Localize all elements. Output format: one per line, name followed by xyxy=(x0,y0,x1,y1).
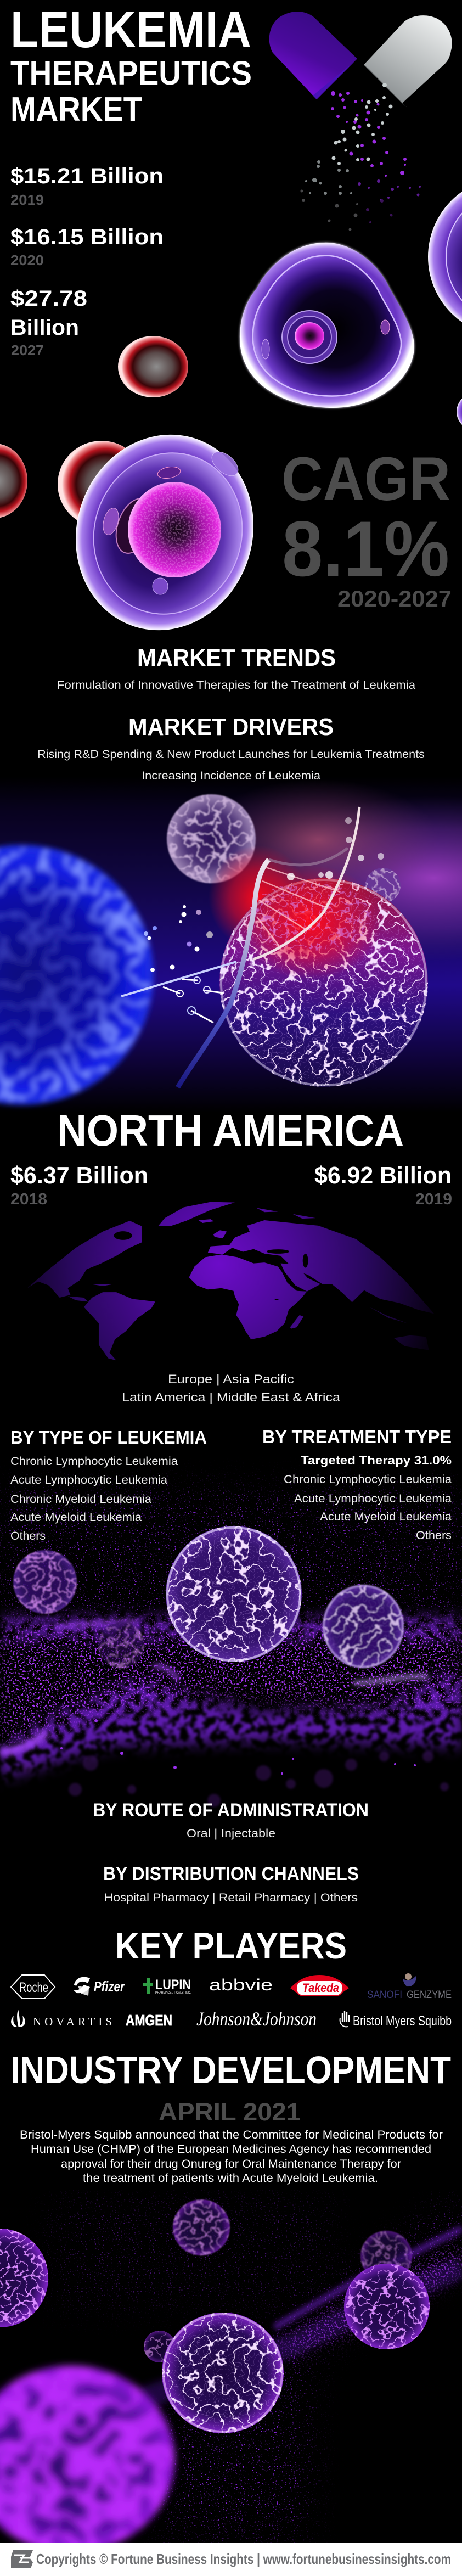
value: north america 2019: 2019 xyxy=(415,1191,452,1208)
logo: Sanofi Genzyme xyxy=(367,1973,452,2001)
logo: Lupin: PHARMACEUTICALS, INC. xyxy=(155,1991,191,1995)
list: Others xyxy=(416,1529,452,1542)
cell: large purple with magenta nucleus xyxy=(50,411,279,654)
DNA strand xyxy=(121,807,359,1087)
CAGR callout: 8.1% xyxy=(282,506,449,593)
list: Acute Myeloid Leukemia xyxy=(320,1511,452,1523)
CAGR callout: CAGR xyxy=(281,445,450,513)
text: development description: approval for their drug Onureg for Oral Maintenance Therapy for xyxy=(61,2158,401,2170)
text: trend: Formulation of Innovative Therapies for the Treatment of Leukemia xyxy=(57,679,415,692)
title: MARKET xyxy=(10,91,142,128)
panel: by type of leukemia xyxy=(10,1427,207,1542)
heading: key players: KEY PLAYERS xyxy=(115,1925,347,1967)
sparse particles xyxy=(0,1493,462,1625)
list: Others xyxy=(10,1530,46,1542)
value: north america 2018 xyxy=(10,1162,148,1208)
panel: market drivers xyxy=(37,714,425,782)
logo: Pfizer: Pfizer xyxy=(94,1978,125,1995)
list: Chronic Lymphocytic Leukemia xyxy=(10,1455,178,1468)
panel: by treatment type xyxy=(262,1427,452,1542)
cell: small behind center xyxy=(144,2331,176,2362)
map details: inland seas xyxy=(114,1231,308,1300)
cell: right edge large xyxy=(428,177,462,336)
heading: BY DISTRIBUTION CHANNELS xyxy=(103,1864,359,1884)
heading: BY TYPE OF LEUKEMIA xyxy=(10,1427,207,1447)
text: drivers: Increasing Incidence of Leukemia xyxy=(142,770,320,782)
cell: small dim left xyxy=(13,1550,77,1614)
text: other regions xyxy=(122,1372,341,1404)
CAGR callout: 2020-2027 xyxy=(337,586,452,611)
logo: Roche: Roche xyxy=(19,1980,48,1995)
logo: Takeda xyxy=(290,1975,349,1996)
value: north america 2019: $6.92 Billion xyxy=(314,1162,452,1189)
cell: right dim xyxy=(360,2230,413,2270)
cell: red left edge xyxy=(0,444,27,518)
text: drivers xyxy=(37,748,425,782)
value: north america 2018: $6.37 Billion xyxy=(10,1162,148,1189)
icon: Fortune Business Insights logo xyxy=(11,2550,33,2568)
items: Hospital Pharmacy | Retail Pharmacy | Others xyxy=(104,1892,358,1904)
panel: footer xyxy=(0,2543,462,2576)
list xyxy=(284,1473,452,1542)
list: Acute Lymphocytic Leukemia xyxy=(10,1474,167,1486)
highlighted share: Targeted Therapy 31.0% xyxy=(301,1453,452,1467)
title: LEUKEMIA xyxy=(10,1,251,58)
small bright dots xyxy=(60,1719,416,1775)
logo: Novartis xyxy=(12,2011,112,2028)
cell: right xyxy=(323,1585,404,1668)
list: Acute Lymphocytic Leukemia xyxy=(294,1492,452,1505)
cell: right edge small xyxy=(457,390,462,434)
logo: Amgen: AMGEN xyxy=(126,2012,172,2029)
cell: left bright xyxy=(0,2229,48,2327)
panel: bottom cells illustration xyxy=(0,2196,462,2552)
date: April 2021: APRIL 2021 xyxy=(159,2098,301,2126)
cell: blurred foreground xyxy=(0,2366,174,2552)
text: other regions: Latin America | Middle East & Africa xyxy=(122,1390,341,1404)
logo: Lupin xyxy=(143,1977,191,1995)
cell: small right xyxy=(365,868,401,903)
logo: Novartis: NOVARTIS xyxy=(33,2015,112,2028)
value 2027: 2027 xyxy=(11,342,44,358)
value 2027: Billion xyxy=(10,316,79,340)
value 2019: $15.21 Billion xyxy=(10,164,164,188)
cell: dim lower left xyxy=(98,1622,144,1668)
list: Chronic Lymphocytic Leukemia xyxy=(284,1473,452,1486)
panel: by route of administration xyxy=(93,1800,369,1840)
logo: AbbVie: abbvie xyxy=(209,1976,273,1994)
text: development description xyxy=(20,2129,443,2185)
cell: blurred grey upper xyxy=(167,794,256,883)
cell: red behind large cell xyxy=(58,441,145,527)
value 2027: $27.78 xyxy=(10,287,87,311)
logo: Sanofi Genzyme: GENZYME xyxy=(407,1989,452,2001)
floating dots xyxy=(144,817,384,972)
items: Oral | Injectable xyxy=(187,1827,275,1840)
value 2020: $16.15 Billion xyxy=(10,225,164,249)
text: drivers: Rising R&D Spending & New Product Launches for Leukemia Treatments xyxy=(37,748,425,761)
panel: particle wave with cells xyxy=(0,1493,462,1807)
panel: by distribution channels xyxy=(103,1864,359,1904)
world map xyxy=(27,1202,434,1360)
cell: center bright xyxy=(162,2313,284,2433)
icon: open capsule xyxy=(269,12,452,108)
cell: right bright xyxy=(344,2264,430,2349)
logo: Sanofi Genzyme: SANOFI xyxy=(367,1989,402,2001)
value 2020: 2020 xyxy=(10,252,44,268)
logo: Roche xyxy=(11,1975,55,1999)
value: north america 2018: 2018 xyxy=(10,1191,47,1208)
logo: Pfizer xyxy=(74,1977,125,1996)
value 2020 xyxy=(10,225,164,268)
text: other regions: Europe | Asia Pacific xyxy=(168,1372,294,1386)
panel: company logos xyxy=(11,1973,452,2030)
value: north america 2019 xyxy=(314,1162,452,1208)
cell: top dim xyxy=(173,2199,230,2255)
title: THERAPEUTICS xyxy=(10,54,252,92)
dense particles xyxy=(0,1625,462,1746)
value 2019: 2019 xyxy=(10,192,44,208)
list: Acute Myeloid Leukemia xyxy=(10,1511,142,1524)
panel: market trends xyxy=(57,644,415,692)
red glow xyxy=(210,848,301,938)
CAGR callout xyxy=(281,445,452,611)
heading: BY TREATMENT TYPE xyxy=(262,1427,452,1447)
cell: main textured cancer cell xyxy=(219,865,428,1087)
list: Chronic Myeloid Leukemia xyxy=(10,1493,151,1506)
heading: market trends: MARKET TRENDS xyxy=(137,644,336,671)
heading: market drivers: MARKET DRIVERS xyxy=(128,714,334,740)
particles spilling from capsule xyxy=(301,83,421,231)
panel: hero art xyxy=(0,12,462,654)
text: development description: Human Use (CHMP) of the European Medicines Agency has recommended xyxy=(31,2143,431,2156)
text: development description: Bristol-Myers Squibb announced that the Committee for Medicinal Products for xyxy=(20,2129,443,2141)
value 2027 xyxy=(10,287,87,358)
cell: red upper xyxy=(118,336,188,397)
list xyxy=(10,1455,178,1542)
logo: Johnson & Johnson: Johnson&Johnson xyxy=(196,2008,317,2030)
heading: BY ROUTE OF ADMINISTRATION xyxy=(93,1800,369,1821)
particle bands xyxy=(55,2196,462,2536)
text: development description: the treatment of patients with Acute Myeloid Leukemia. xyxy=(83,2172,378,2185)
cell: large blue blurred xyxy=(0,845,154,1105)
title xyxy=(10,1,252,128)
value 2019 xyxy=(10,164,164,208)
bright streaks xyxy=(0,1622,428,1752)
soft bokeh dots xyxy=(22,1751,449,1807)
panel: cell and DNA illustration xyxy=(0,777,462,1113)
logo: Lupin: LUPIN xyxy=(155,1977,191,1993)
heading: north america: NORTH AMERICA xyxy=(57,1106,404,1155)
cell: large center xyxy=(166,1526,302,1662)
soft blobs xyxy=(0,1619,462,1778)
cell: purple with small nucleus xyxy=(240,243,414,408)
logo: Takeda: Takeda xyxy=(302,1981,339,1995)
market size values xyxy=(10,164,164,358)
